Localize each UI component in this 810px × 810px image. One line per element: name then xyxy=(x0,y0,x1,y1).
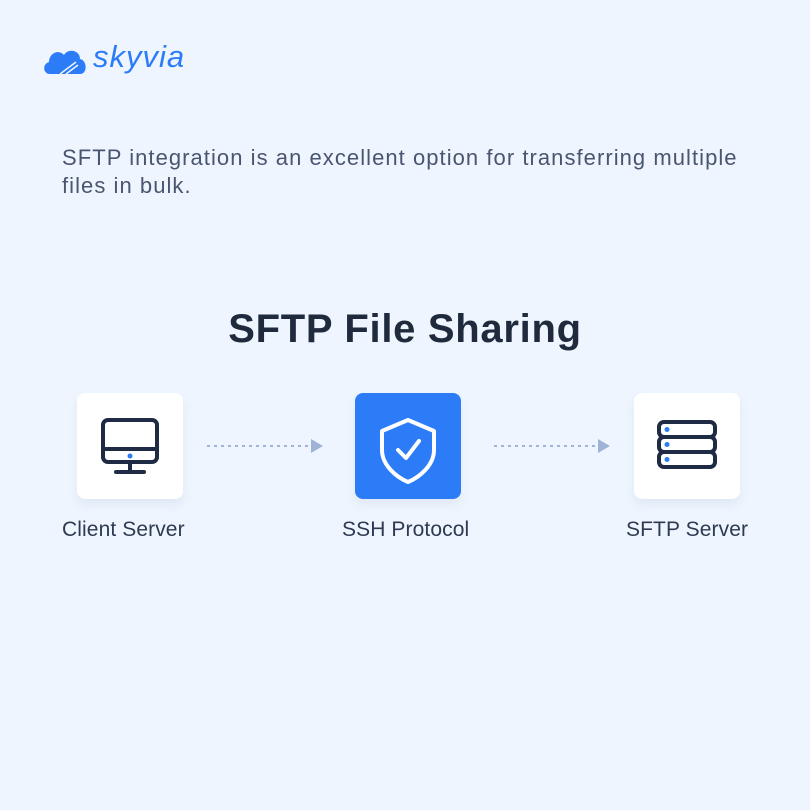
logo: skyvia xyxy=(93,39,185,74)
label: sftp server: SFTP Server xyxy=(626,518,748,541)
label: ssh protocol: SSH Protocol xyxy=(342,518,469,541)
arrow 1 xyxy=(207,439,323,453)
intro text xyxy=(62,145,738,198)
intro text: SFTP integration is an excellent option for transferring multiple xyxy=(62,145,738,170)
node: sftp server xyxy=(634,393,740,499)
label: client server: Client Server xyxy=(62,518,185,541)
icon: monitor xyxy=(101,418,159,474)
logo xyxy=(44,39,185,74)
arrow 2 xyxy=(494,439,610,453)
icon: server xyxy=(657,420,717,469)
node: client server xyxy=(77,393,183,499)
icon: shield xyxy=(380,418,436,484)
intro text: files in bulk. xyxy=(62,173,192,198)
node: ssh protocol xyxy=(355,393,461,499)
title: SFTP File Sharing xyxy=(228,307,582,351)
